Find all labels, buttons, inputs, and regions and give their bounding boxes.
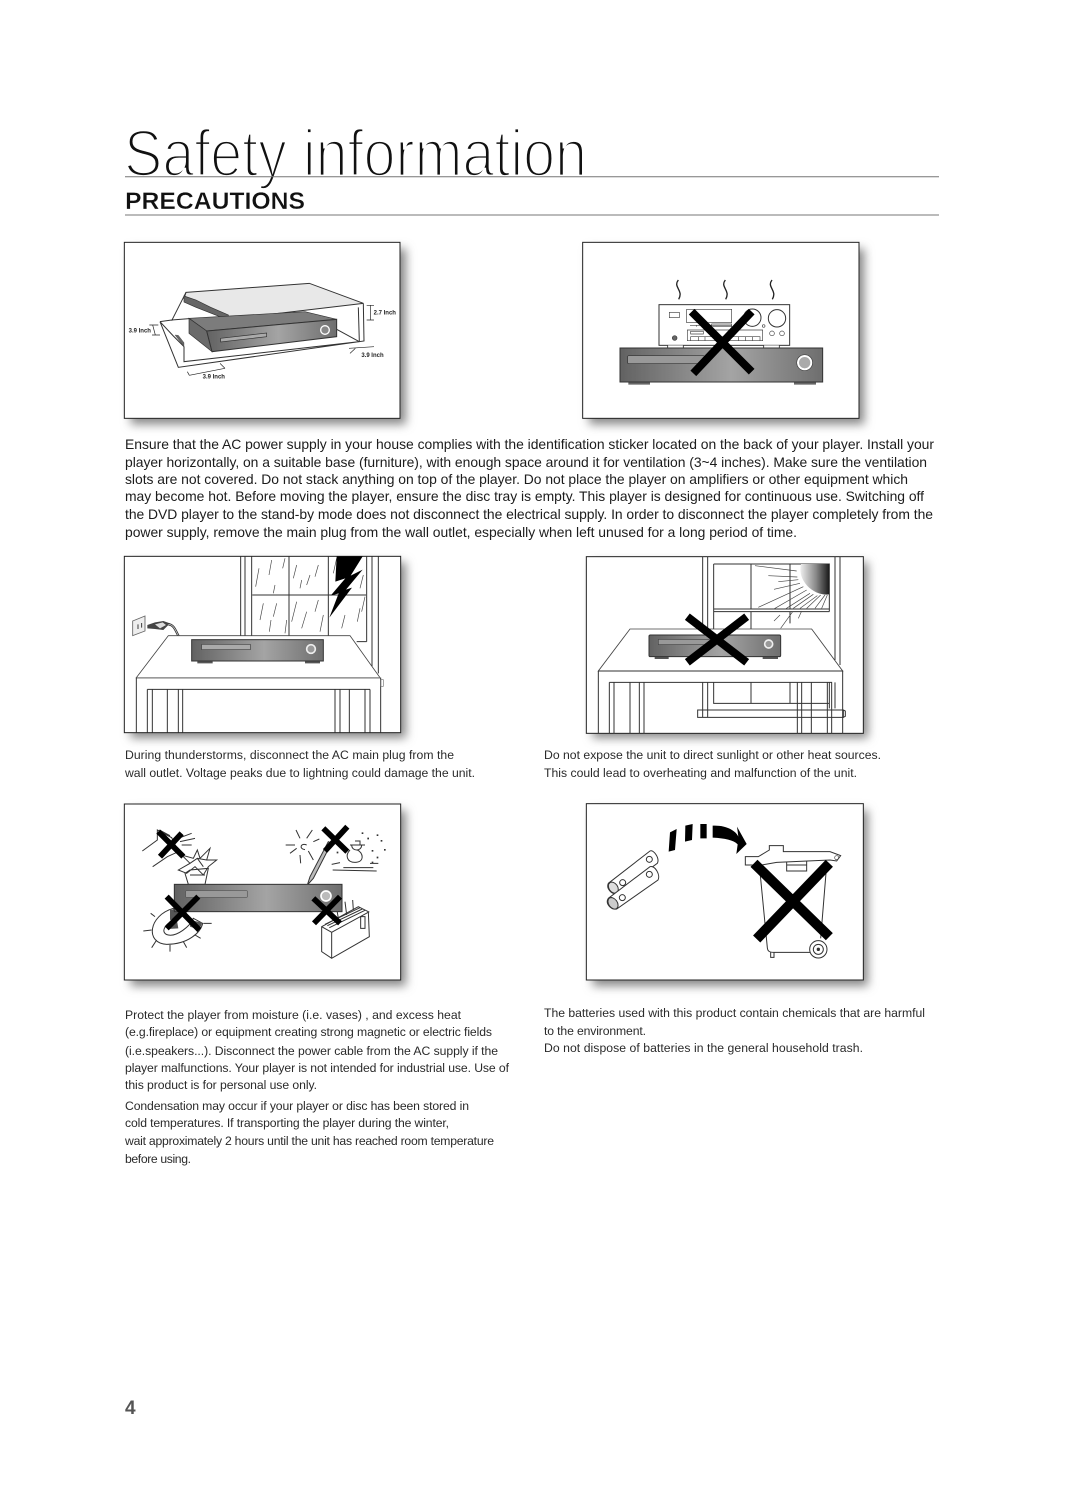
panel: moisture, heat and magnetism xyxy=(124,804,406,986)
title: Safety information xyxy=(124,116,587,190)
caption: thunderstorms: During thunderstorms, disconnect the AC main plug from the xyxy=(125,748,454,762)
caption: batteries: The batteries used with this product contain chemicals that are harmful xyxy=(544,1006,925,1020)
amplifier xyxy=(659,305,790,348)
prohibition cross xyxy=(687,617,747,662)
device xyxy=(189,312,337,352)
caption: moisture and condensation: Protect the player from moisture (i.e. vases) , and excess heat xyxy=(125,1008,462,1022)
panel: do not stack on amplifier xyxy=(583,242,864,424)
sun xyxy=(800,564,829,595)
player xyxy=(649,635,781,659)
panel: direct sunlight xyxy=(586,557,868,738)
caption: moisture and condensation: Condensation may occur if your player or disc has been stored in xyxy=(125,1099,469,1113)
text block: installation: power supply, remove the main plug from the wall outlet, especially when left unused for a long period of time. xyxy=(125,524,797,540)
prohibition cross xyxy=(754,863,829,939)
caption: moisture and condensation: (e.g.fireplace) or equipment creating strong magnetic or electric fields xyxy=(125,1025,492,1039)
heat waves xyxy=(677,280,774,299)
pen xyxy=(307,842,331,885)
panel: ventilation clearance: 3.9 Inch xyxy=(203,375,225,381)
prohibition cross xyxy=(692,312,752,373)
caption: moisture and condensation: player malfunctions. Your player is not intended for industrial use. Use of xyxy=(125,1061,510,1075)
caption: thunderstorms: wall outlet. Voltage peaks due to lightning could damage the unit. xyxy=(124,766,475,780)
panel: battery disposal xyxy=(586,804,868,986)
text block: installation: player horizontally, on a suitable base (furniture), with enough space around it for ventilation (3~4 inches). Make sure the ventilation xyxy=(125,454,927,470)
text block: installation xyxy=(125,436,934,540)
player xyxy=(192,640,323,663)
panel: ventilation clearance xyxy=(124,242,406,424)
panel: ventilation clearance: 2.7 Inch xyxy=(374,310,396,316)
arrow xyxy=(669,824,747,854)
caption: moisture and condensation: wait approximately 2 hours until the unit has reached room temperature xyxy=(124,1134,494,1148)
caption: thunderstorms xyxy=(124,748,475,780)
section heading: PRECAUTIONS xyxy=(125,188,305,215)
wheelie bin xyxy=(745,846,841,958)
caption: batteries: to the environment. xyxy=(544,1024,646,1038)
wall socket xyxy=(133,616,145,636)
text block: installation: Ensure that the AC power supply in your house complies with the identification sticker located on the back of your player. Install your xyxy=(125,436,934,452)
table xyxy=(136,636,380,678)
batteries xyxy=(606,851,659,911)
plug and cord xyxy=(147,621,170,630)
panel: ventilation clearance: 3.9 Inch xyxy=(129,329,151,335)
caption: sunlight: Do not expose the unit to direct sunlight or other heat sources. xyxy=(544,748,881,762)
magnet xyxy=(152,908,203,944)
sun xyxy=(286,830,319,863)
player xyxy=(174,884,342,912)
caption: moisture and condensation xyxy=(124,1008,510,1166)
text block: installation: the DVD player to the stand-by mode does not disconnect the electrical supply. In order to disconnect the player completely from the xyxy=(125,506,933,522)
lightning bolt xyxy=(329,556,363,618)
text block: installation: may become hot. Before moving the player, ensure the disc tray is empty. This player is designed for continuous use. Switching off xyxy=(125,488,924,504)
plant xyxy=(178,848,217,884)
caption: moisture and condensation: cold temperatures. If transporting the player during the winter, xyxy=(125,1116,449,1130)
caption: moisture and condensation: before using. xyxy=(125,1152,191,1166)
caption: moisture and condensation: this product is for personal use only. xyxy=(125,1078,317,1092)
page number: 4 xyxy=(125,1398,136,1419)
snowman xyxy=(332,841,378,871)
panel: ventilation clearance: 3.9 Inch xyxy=(361,353,384,359)
player xyxy=(620,348,823,385)
prohibition crosses xyxy=(158,827,347,930)
caption: sunlight xyxy=(544,748,881,780)
panel: thunderstorm xyxy=(124,556,406,738)
text block: installation: slots are not covered. Do not stack anything on top of the player. Do not place the player on amplifiers or other equipment which xyxy=(125,471,908,487)
table xyxy=(598,629,843,671)
caption: batteries xyxy=(544,1006,925,1055)
caption: batteries: Do not dispose of batteries in the general household trash. xyxy=(544,1041,863,1055)
caption: sunlight: This could lead to overheating and malfunction of the unit. xyxy=(544,766,857,780)
caption: moisture and condensation: (i.e.speakers...). Disconnect the power cable from the AC supply if the xyxy=(125,1044,498,1058)
heater xyxy=(322,907,369,958)
spray hand xyxy=(142,830,195,867)
